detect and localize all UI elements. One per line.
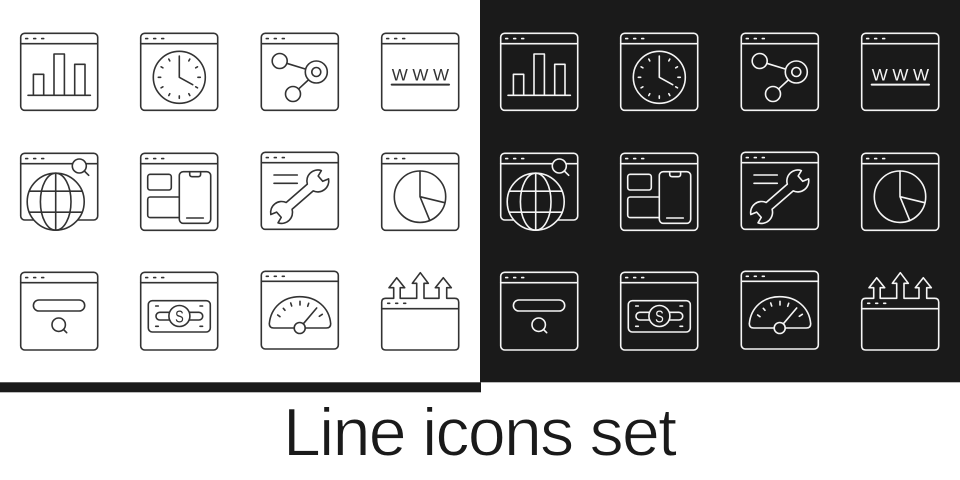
icon: globe search window	[21, 153, 98, 230]
icon: www window: WWW	[872, 66, 929, 85]
icon: clock window	[141, 33, 218, 110]
panel: light icons	[21, 33, 459, 350]
dark panel background	[480, 0, 960, 382]
icon: search bar window	[21, 272, 98, 350]
icon: pie chart window	[862, 153, 939, 230]
icon: clock window	[621, 33, 698, 110]
icon: speedometer window	[261, 271, 338, 349]
icon: money banknote window	[141, 272, 218, 350]
icon: speedometer window	[741, 271, 818, 349]
icon: upload arrows window	[862, 273, 939, 350]
icon: www window: WWW	[392, 66, 449, 85]
icon: search bar window	[501, 272, 578, 350]
icon: www window	[382, 33, 459, 110]
icon: share nodes window	[261, 33, 338, 110]
icon: upload arrows window	[382, 273, 459, 350]
icon: responsive layout window	[141, 153, 218, 230]
icon: money banknote window: S	[175, 307, 184, 327]
icon: share nodes window	[741, 33, 818, 110]
panel: dark icons	[501, 33, 939, 350]
icon: globe search window	[501, 153, 578, 230]
icon: money banknote window: S	[655, 307, 664, 327]
icon: pie chart window	[382, 153, 459, 230]
icon: wrench settings window	[741, 152, 818, 229]
title: Line icons set	[283, 395, 677, 471]
icon: bar chart window	[501, 33, 578, 110]
icon: money banknote window	[621, 272, 698, 350]
icon: wrench settings window	[261, 152, 338, 229]
icon: responsive layout window	[621, 153, 698, 230]
icon: bar chart window	[21, 33, 98, 110]
dark bottom band under the light panel	[0, 382, 481, 392]
icon: www window	[862, 33, 939, 110]
